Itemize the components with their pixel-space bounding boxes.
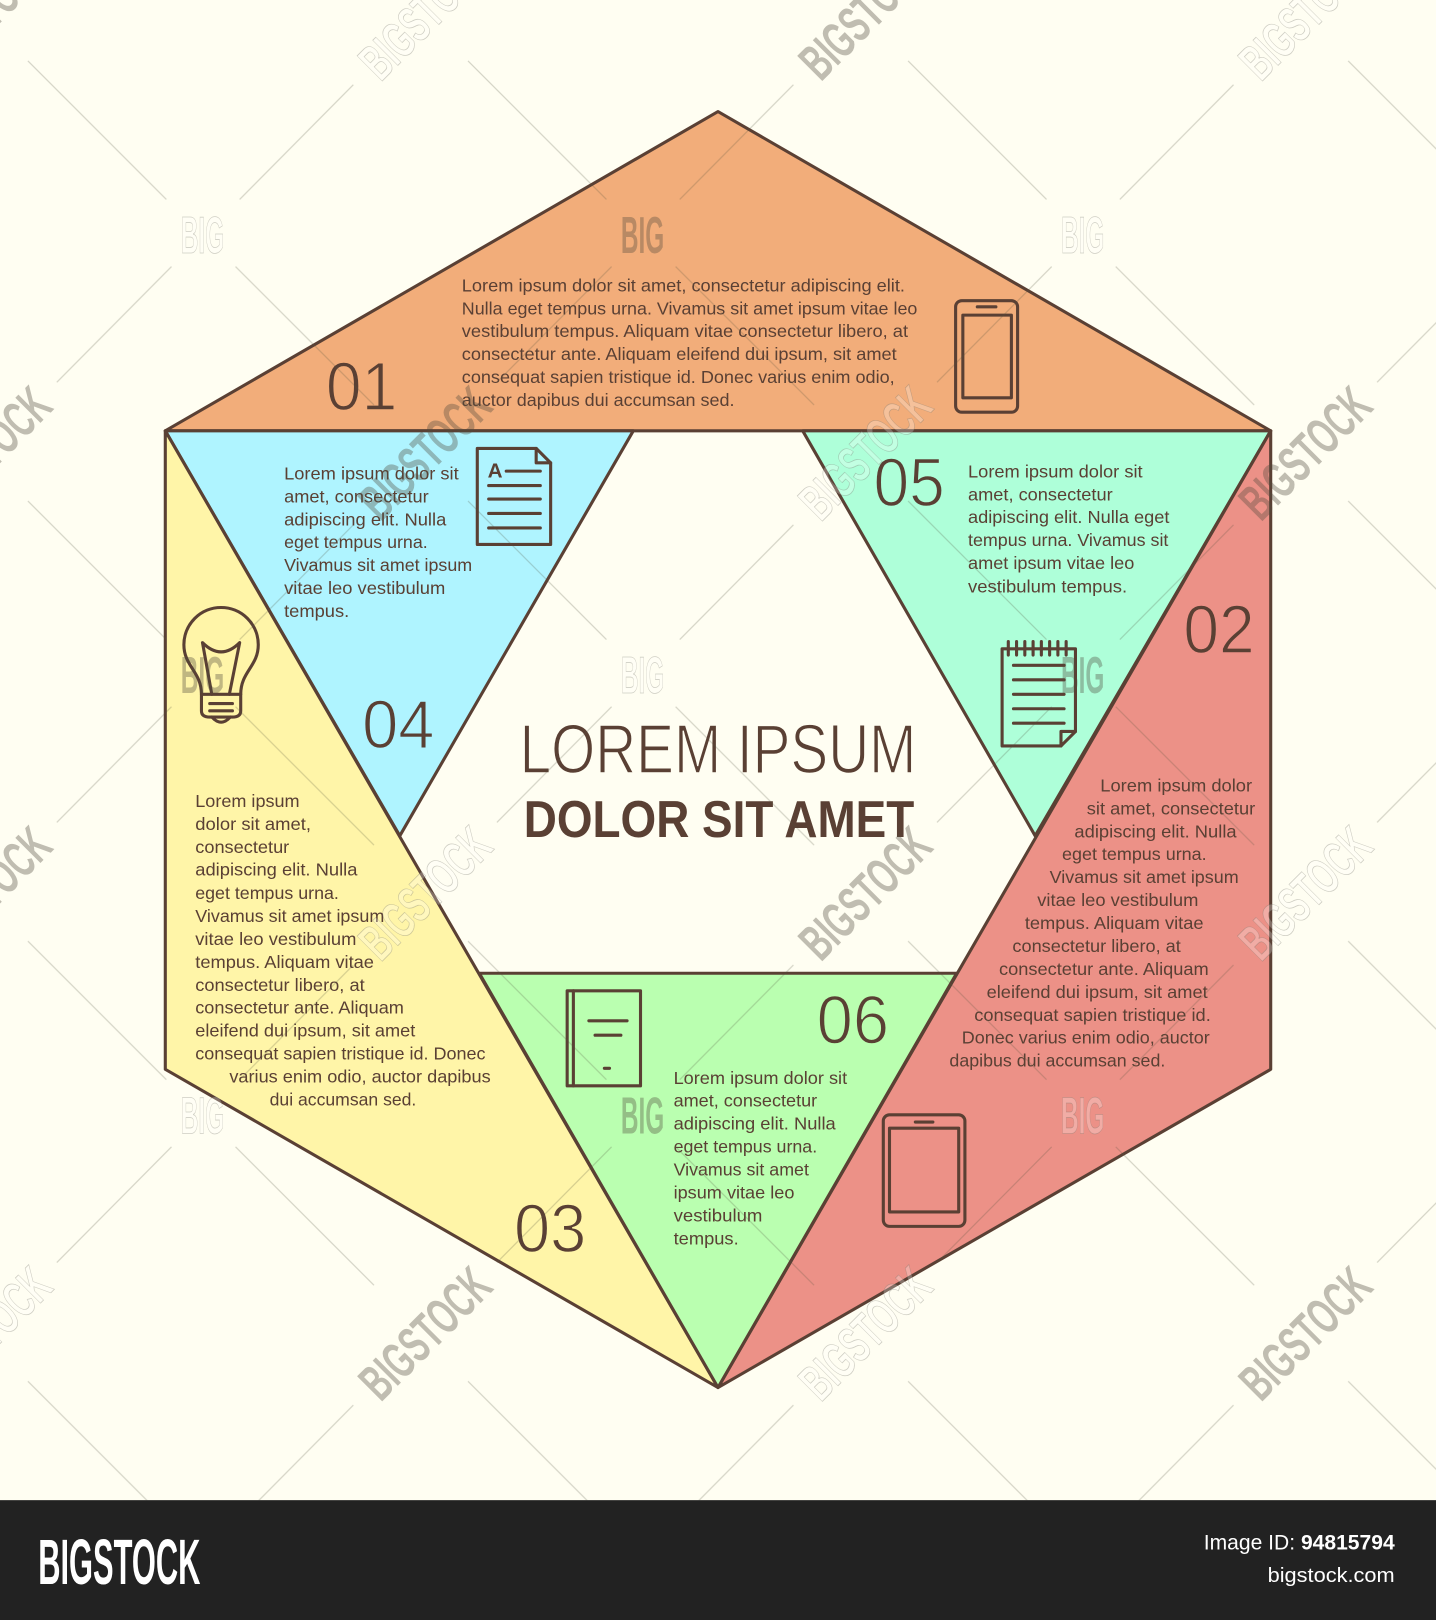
panel 04: blue triangle — [165, 431, 633, 836]
watermark: BIG marks: BIG — [181, 206, 224, 264]
watermark: BIG marks: BIG — [181, 646, 224, 704]
icon: text document: A — [488, 459, 503, 482]
text block 05: amet, consectetur — [968, 484, 1113, 504]
text block 03: dolor sit amet, — [195, 814, 311, 834]
text block 03: consectetur ante. Aliquam — [195, 998, 404, 1018]
text block 06: eget tempus urna. — [674, 1137, 817, 1157]
text block 06: Vivamus sit amet — [674, 1160, 809, 1180]
text block 06: vestibulum — [674, 1205, 762, 1225]
text block 04 — [284, 463, 472, 621]
text block 04: Vivamus sit amet ipsum — [284, 555, 472, 575]
text block 02: vitae leo vestibulum — [1037, 890, 1198, 910]
watermark: BIGSTOCK marks: BIGSTOCK — [348, 375, 503, 530]
text block 01: Lorem ipsum dolor sit amet, consectetur adipiscing elit. — [462, 275, 905, 295]
footer bar: BIGSTOCK — [38, 1526, 200, 1598]
watermark: BIGSTOCK marks: BIGSTOCK — [788, 1256, 943, 1411]
panel 06: green triangle — [479, 973, 957, 1388]
text block 04: tempus. — [284, 601, 349, 621]
text block 04: amet, consectetur — [284, 486, 429, 506]
text block 03: consectetur — [195, 837, 289, 857]
watermark: BIGSTOCK marks: BIGSTOCK — [348, 1256, 503, 1411]
number 05: 05 — [873, 445, 945, 521]
text block 01: consequat sapien tristique id. Donec varius enim odio, — [462, 367, 895, 387]
text block 02: eget tempus urna. — [1062, 844, 1207, 864]
number 03: 03 — [514, 1191, 586, 1267]
text block 01: auctor dapibus dui accumsan sed. — [462, 390, 735, 410]
text block 04: adipiscing elit. Nulla — [284, 509, 447, 529]
watermark: BIG marks — [181, 206, 1104, 1144]
icon: tablet — [883, 1115, 965, 1226]
watermark: BIG marks: BIG — [621, 646, 664, 704]
text block 03: eget tempus urna. — [195, 883, 339, 903]
watermark: BIGSTOCK marks: BIGSTOCK — [788, 816, 943, 971]
footer bar — [0, 1500, 1436, 1620]
centre title: LOREM IPSUM — [520, 710, 916, 788]
text block 03: eleifend dui ipsum, sit amet — [195, 1021, 415, 1041]
text block 03: consectetur libero, at — [195, 975, 365, 995]
panel 02: red wedge — [718, 431, 1271, 1388]
text block 03: consequat sapien tristique id. Donec — [195, 1044, 486, 1064]
text block 02: Vivamus sit amet ipsum — [1050, 867, 1239, 887]
text block 03: varius enim odio, auctor dapibus — [229, 1067, 491, 1087]
text block 02: Lorem ipsum dolor — [1100, 775, 1252, 795]
text block 02: tempus. Aliquam vitae — [1025, 913, 1204, 933]
icon: book — [567, 991, 641, 1086]
text block 01: vestibulum tempus. Aliquam vitae consectetur libero, at — [462, 321, 908, 341]
text block 05 — [968, 461, 1170, 596]
infographic canvas: BIG — [1061, 646, 1104, 704]
text block 03: adipiscing elit. Nulla — [195, 860, 358, 880]
text block 02: eleifend dui ipsum, sit amet — [987, 982, 1208, 1002]
text block 06 — [674, 1068, 847, 1248]
icon: light bulb — [184, 608, 258, 722]
text block 05: vestibulum tempus. — [968, 576, 1127, 596]
text block 02: consectetur ante. Aliquam — [999, 959, 1209, 979]
footer site: bigstock.com — [1268, 1564, 1395, 1587]
text block 03: tempus. Aliquam vitae — [195, 952, 374, 972]
text block 05: tempus urna. Vivamus sit — [968, 530, 1169, 550]
text block 02: consequat sapien tristique id. — [974, 1005, 1211, 1025]
text block 03: Lorem ipsum — [195, 791, 300, 811]
number 04: 04 — [362, 687, 434, 763]
panel 03: yellow wedge — [165, 431, 718, 1388]
watermark: BIG marks: BIG — [181, 1086, 224, 1144]
text block 02: consectetur libero, at — [1012, 936, 1181, 956]
text block 02: dapibus dui accumsan sed. — [949, 1051, 1165, 1071]
text block 02: Donec varius enim odio, auctor — [962, 1028, 1210, 1048]
watermark: BIG marks: BIG — [621, 1086, 664, 1144]
text block 03: vitae leo vestibulum — [195, 929, 356, 949]
text block 06: adipiscing elit. Nulla — [674, 1114, 836, 1134]
text block 02: sit amet, consectetur — [1087, 798, 1255, 818]
watermark: BIGSTOCK marks: BIGSTOCK — [788, 375, 943, 530]
text block 06: amet, consectetur — [674, 1091, 817, 1111]
infographic canvas: BIG — [1061, 1086, 1104, 1144]
number 06: 06 — [817, 982, 889, 1058]
text block 03 — [195, 791, 491, 1109]
icon: smartphone — [956, 301, 1018, 412]
text block 01 — [462, 275, 918, 410]
panel 05: mint triangle — [803, 431, 1271, 836]
centre title — [520, 710, 916, 848]
watermark: BIGSTOCK marks: BIGSTOCK — [348, 816, 503, 971]
text block 02: adipiscing elit. Nulla — [1074, 821, 1237, 841]
text block 03: Vivamus sit amet ipsum — [195, 906, 384, 926]
text block 03: dui accumsan sed. — [270, 1089, 416, 1109]
text block 06: tempus. — [674, 1228, 739, 1248]
text block 06: Lorem ipsum dolor sit — [674, 1068, 847, 1088]
text block 05: amet ipsum vitae leo — [968, 553, 1135, 573]
panel 01: orange roof — [165, 112, 1271, 431]
icon: notepad — [1002, 642, 1075, 746]
text block 02 — [949, 775, 1255, 1071]
infographic canvas: BIG — [1061, 206, 1104, 264]
text block 01: consectetur ante. Aliquam eleifend dui ipsum, sit amet — [462, 344, 897, 364]
number 02: 02 — [1183, 592, 1255, 668]
text block 04: vitae leo vestibulum — [284, 578, 445, 598]
icon: text document — [477, 448, 551, 544]
text block 04: Lorem ipsum dolor sit — [284, 463, 459, 483]
text block 06: ipsum vitae leo — [674, 1182, 795, 1202]
watermark: BIG marks: BIG — [621, 206, 664, 264]
text block 05: Lorem ipsum dolor sit — [968, 461, 1143, 481]
text block 05: adipiscing elit. Nulla eget — [968, 507, 1170, 527]
text block 01: Nulla eget tempus urna. Vivamus sit amet ipsum vitae leo — [462, 298, 918, 318]
number 01: 01 — [326, 349, 397, 425]
text block 04: eget tempus urna. — [284, 532, 428, 552]
centre title: DOLOR SIT AMET — [524, 790, 914, 848]
image id: Image ID: 94815794 — [1204, 1532, 1395, 1555]
